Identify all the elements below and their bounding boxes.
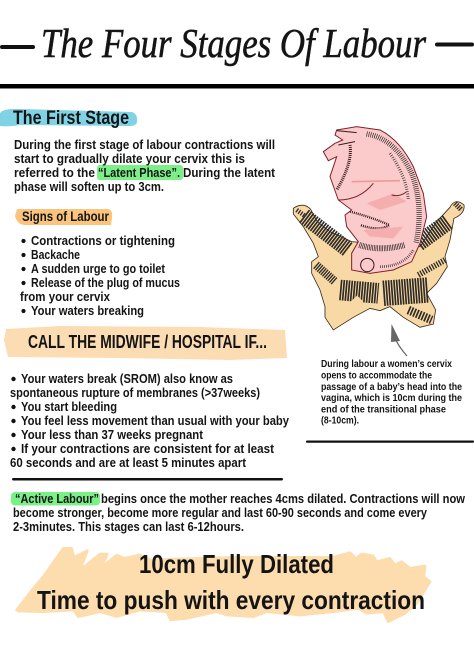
scribble background	[17, 548, 430, 622]
list: signs of labour: Contractions or tightening	[31, 234, 175, 248]
callout text: 10cm Fully Dilated	[139, 549, 334, 579]
list: when to call: spontaneous rupture of membranes (>37weeks)	[10, 386, 260, 400]
text block: first stage description: “Latent Phase”.	[98, 166, 180, 180]
banner: call the midwife / hospital if: CALL THE MIDWIFE / HOSPITAL IF...	[28, 332, 267, 352]
panel: the first stage	[0, 108, 276, 194]
list: when to call: Your less than 37 weeks pregnant	[21, 428, 204, 442]
list: when to call: You start bleeding	[21, 400, 117, 414]
caption: cervix explanation: opens to accommodate the	[321, 370, 432, 382]
arrow: points to the cervix	[391, 324, 407, 356]
panel: call the midwife	[4, 326, 289, 470]
illustration: baby in pelvis	[293, 127, 464, 330]
list: signs of labour	[20, 234, 180, 318]
text block: first stage description: During the first stage of labour contractions will	[14, 138, 275, 152]
list: when to call: 60 seconds and are at least 5 minutes apart	[10, 456, 247, 470]
list: when to call: You feel less movement than usual with your baby	[21, 414, 289, 428]
list: when to call: If your contractions are consistent for at least	[21, 442, 275, 456]
baby	[323, 127, 427, 273]
heading: Signs of Labour: Signs of Labour	[22, 208, 109, 224]
text block: first stage description: start to gradually dilate your cervix this is	[14, 152, 245, 166]
caption: cervix explanation: (8-10cm).	[321, 414, 359, 426]
list: when to call: Your waters break (SROM) also know as	[21, 372, 233, 386]
callout text: Time to push with every contraction	[37, 585, 425, 615]
list: signs of labour: from your cervix	[20, 290, 110, 304]
text block: first stage description: phase will soften up to 3cm.	[14, 180, 164, 194]
text block: first stage description	[14, 138, 276, 194]
text block: active labour	[11, 492, 465, 534]
list: signs of labour: Your waters breaking	[31, 304, 144, 318]
list: signs of labour: A sudden urge to go toilet	[31, 262, 166, 276]
caption: cervix explanation	[321, 358, 462, 426]
text block: first stage description: During the latent	[183, 166, 276, 180]
callout text	[37, 549, 425, 615]
text block: active labour: “Active Labour”	[15, 492, 99, 506]
list: when to call	[10, 372, 289, 470]
list: signs of labour: Release of the plug of mucus	[31, 276, 180, 290]
caption: cervix explanation: end of the transitional phase	[321, 404, 446, 416]
panel: signs of labour	[15, 208, 180, 318]
text block: first stage description: referred to the	[14, 166, 95, 180]
list: signs of labour: Backache	[31, 248, 80, 262]
banner: call the midwife / hospital if	[4, 326, 287, 360]
text block: active labour: 2-3minutes. This stages can last 6-12hours.	[13, 520, 244, 534]
pelvis bone	[293, 202, 464, 330]
text block: active labour: become stronger, become more regular and last 60-90 seconds and come every	[13, 506, 427, 520]
callout: fully dilated	[17, 548, 430, 622]
heading: The First Stage: The First Stage	[13, 108, 129, 129]
